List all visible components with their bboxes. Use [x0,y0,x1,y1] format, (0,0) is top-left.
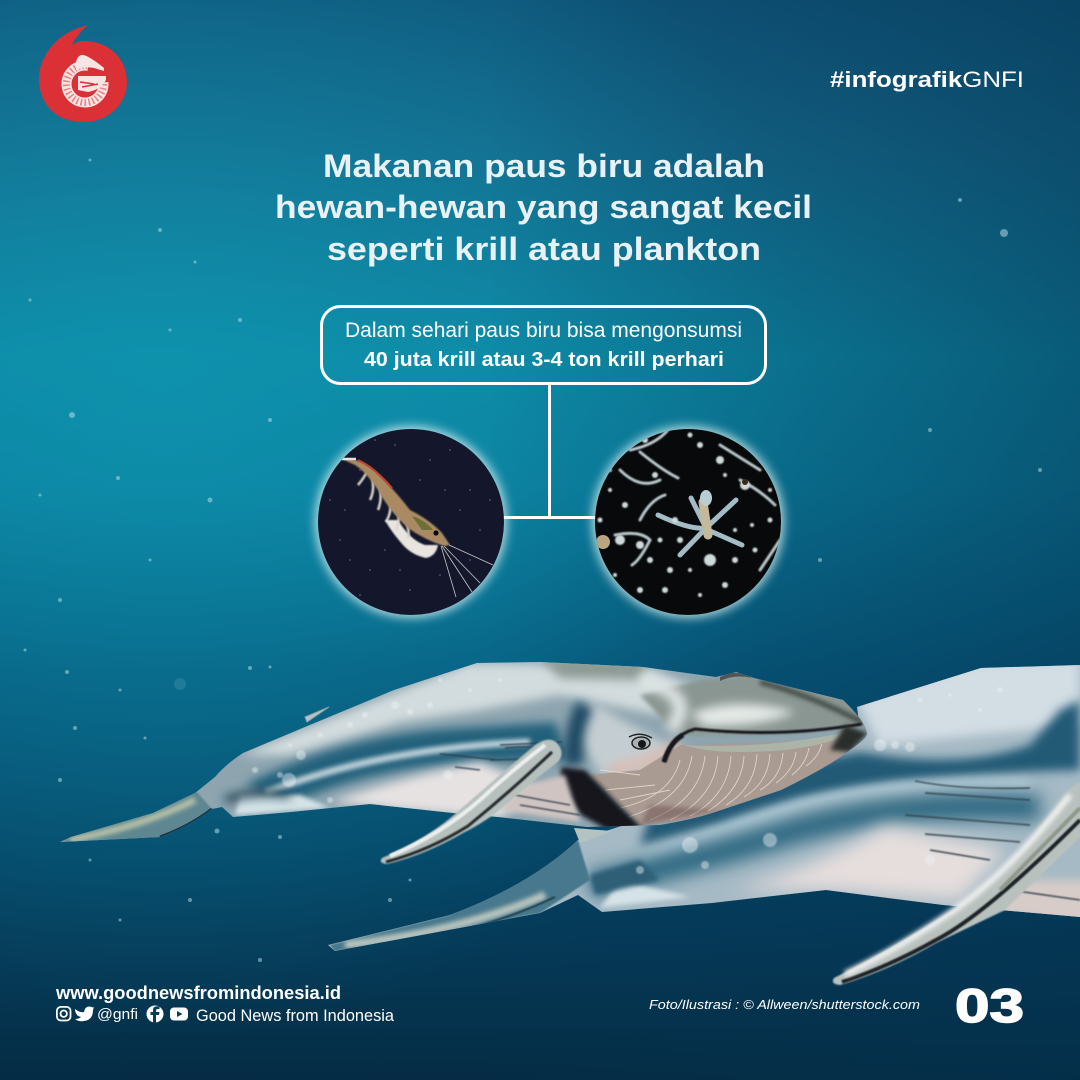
whale: front [60,658,870,845]
dorsal fin [305,707,329,722]
photo: krill [315,426,507,618]
title [275,148,812,267]
connector lines [503,384,596,518]
photo: plankton [592,426,784,618]
icon: youtube [170,1008,188,1020]
callout box: 40 juta krill atau 3-4 ton krill perhari [364,348,724,371]
photo credit: Foto/Ilustrasi : © Allween/shutterstock.com [649,997,920,1012]
page name: Good News from Indonesia [196,1006,395,1025]
icon: facebook [146,1006,164,1023]
logo emblem [65,55,106,104]
flipper: front whale [381,740,562,864]
whale jaw [590,735,860,825]
central organism [658,498,742,555]
pectoral fin small [574,828,612,843]
callout box: Dalam sehari paus biru bisa mengonsumsi [345,319,742,342]
whale eye [629,734,652,749]
title: hewan-hewan yang sangat kecil [275,189,812,225]
handle: @gnfi [97,1006,138,1023]
icon: twitter [75,1006,94,1021]
krill body [342,459,450,546]
flipper: rear whale [833,782,1080,985]
callout box [322,306,766,384]
logo [39,25,127,122]
icon: instagram [57,1007,70,1020]
hashtag: #infografik GNFI [830,67,1024,92]
mouth line [664,724,862,762]
title: seperti krill atau plankton [327,231,761,267]
title: Makanan paus biru adalah [323,148,765,184]
page number: 03 [955,979,1024,1032]
krill legs [385,520,438,558]
dark throat patch [561,767,643,831]
whale: rear [328,660,1080,951]
krill antennae [441,545,493,597]
social row [57,1006,395,1025]
website url: www.goodnewsfromindonesia.id [55,982,341,1003]
whale head [640,675,870,736]
